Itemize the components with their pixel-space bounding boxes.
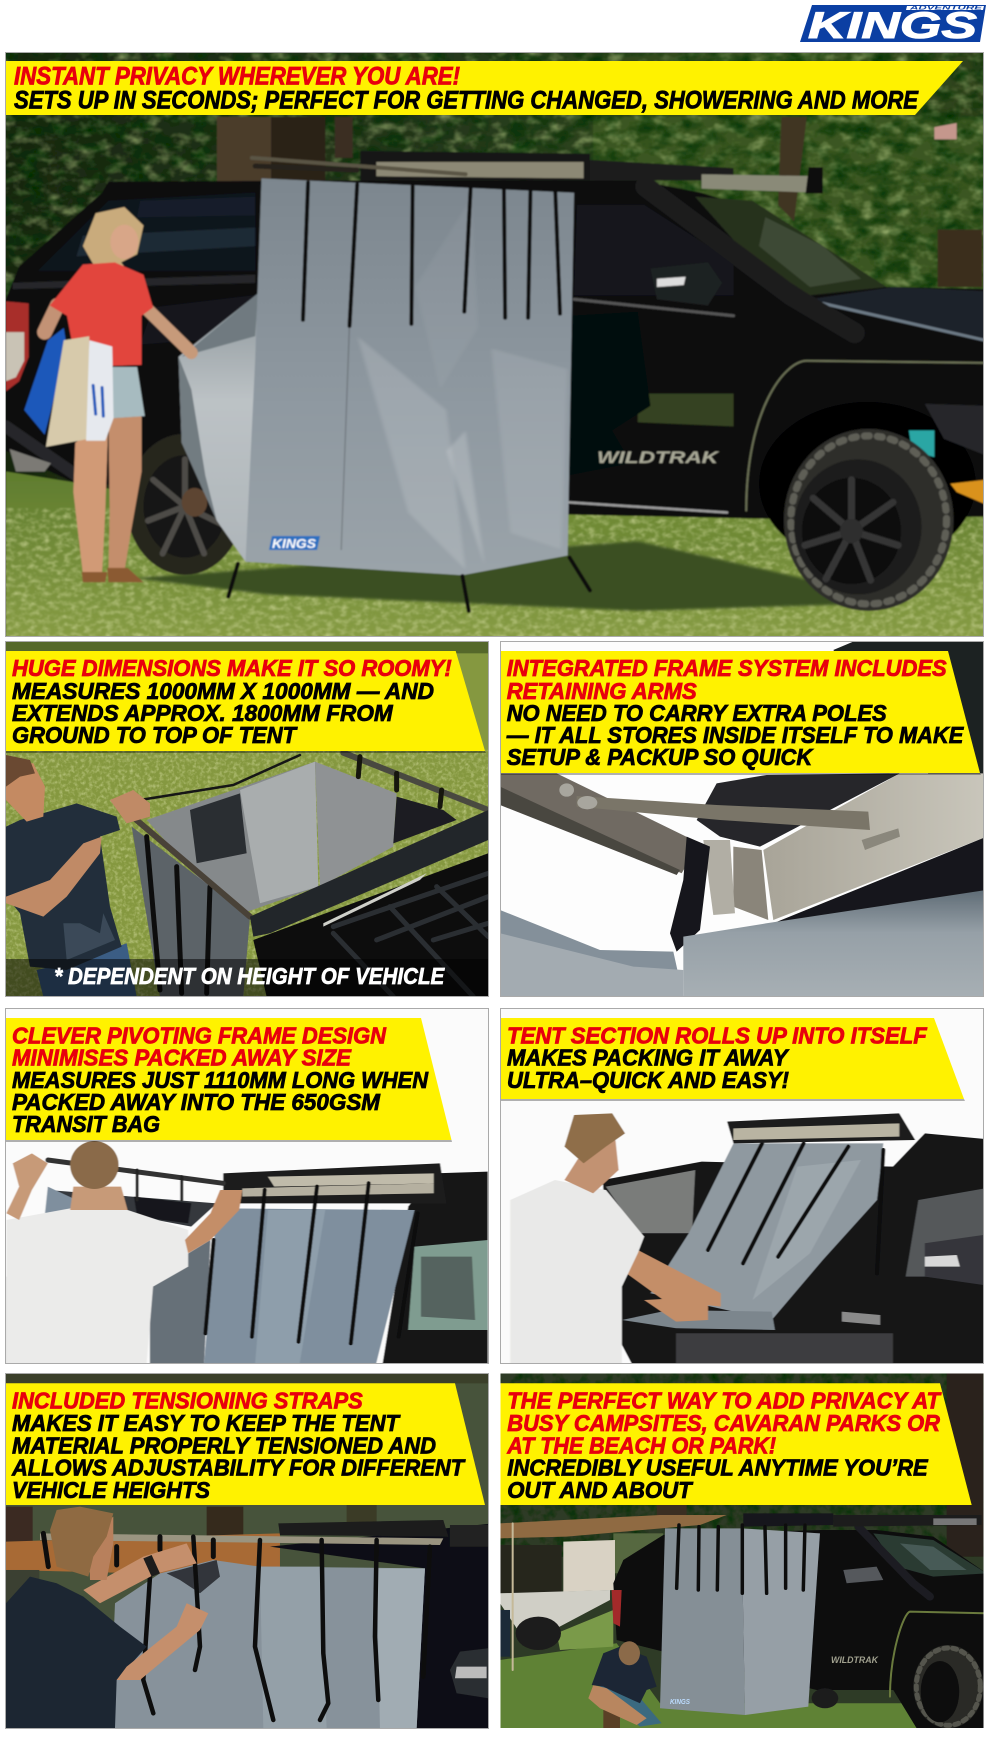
- banner: straps text: INCLUDED TENSIONING STRAPS: [12, 1387, 363, 1413]
- banner: dimensions text: EXTENDS APPROX. 1800MM FROM: [12, 700, 393, 726]
- banner: campsite text: BUSY CAMPSITES, CAVARAN PARKS OR: [507, 1410, 940, 1436]
- photo: man tensioning straps: [0, 1370, 493, 1730]
- banner: pivoting text: [6, 1018, 452, 1142]
- banner: rolls up text: [500, 1018, 965, 1101]
- banner: dimensions text: [6, 651, 486, 753]
- banner: pivoting text: CLEVER PIVOTING FRAME DESIGN: [12, 1022, 387, 1048]
- banner: campsite text: INCREDIBLY USEFUL ANYTIME YOU’RE: [507, 1455, 929, 1481]
- banner: straps text: MAKES IT EASY TO KEEP THE TENT: [12, 1410, 401, 1436]
- banner: campsite text: THE PERFECT WAY TO ADD PRIVACY AT: [507, 1387, 942, 1413]
- banner: frame text: INTEGRATED FRAME SYSTEM INCLUDES: [507, 655, 947, 681]
- logo: Kings Adventure: KINGS: [808, 5, 977, 46]
- photo: man with open tent on roof rack: [0, 640, 493, 1000]
- panel: hero photo with banner: [0, 49, 1000, 644]
- banner: frame text: NO NEED TO CARRY EXTRA POLES: [507, 700, 887, 726]
- banner: frame text: — IT ALL STORES INSIDE ITSELF TO MAKE: [506, 722, 965, 748]
- banner: hero headline: [6, 61, 963, 115]
- logo: Kings Adventure: ADVENTURE: [908, 6, 984, 12]
- door badge: Wildtrak: WILDTRAK: [597, 448, 720, 467]
- banner: campsite text: OUT AND ABOUT: [507, 1477, 693, 1503]
- banner: pivoting text: TRANSIT BAG: [12, 1111, 160, 1137]
- photo: man rolling tent against ute: [510, 1113, 983, 1363]
- banner: campsite text: [500, 1383, 972, 1505]
- door badge: Wildtrak small: WILDTRAK: [831, 1655, 879, 1665]
- tent label: KINGS small: KINGS: [670, 1699, 690, 1706]
- banner: rolls up text: ULTRA–QUICK AND EASY!: [507, 1067, 789, 1093]
- banner: straps text: [6, 1383, 485, 1505]
- hero heading: INSTANT PRIVACY WHEREVER YOU ARE!: [14, 63, 460, 90]
- banner: dimensions text: GROUND TO TOP OF TENT: [12, 722, 298, 748]
- banner: campsite text: AT THE BEACH OR PARK!: [506, 1432, 776, 1458]
- banner: rolls up text: TENT SECTION ROLLS UP INTO ITSELF: [507, 1022, 927, 1048]
- panel: tent rolls up: [497, 1000, 995, 1367]
- tent label: KINGS: KINGS: [272, 536, 316, 551]
- photo: retaining arm close-up: [500, 640, 987, 1000]
- banner: pivoting text: MEASURES JUST 1110MM LONG WHEN: [12, 1067, 429, 1093]
- photo: woman beside tent on black ute: [0, 49, 1000, 644]
- photo: tent on ute at campsite: [500, 1370, 987, 1730]
- photo: man in white shirt at tent: [6, 1141, 488, 1363]
- banner: rolls up text: MAKES PACKING IT AWAY: [507, 1045, 790, 1071]
- banner: pivoting text: MINIMISES PACKED AWAY SIZE: [12, 1045, 352, 1071]
- panel: huge dimensions: [0, 640, 493, 1000]
- banner: dimensions text: HUGE DIMENSIONS MAKE IT SO ROOMY!: [12, 655, 452, 681]
- caption strip: [6, 959, 489, 996]
- logo: Kings Adventure: [800, 5, 986, 46]
- panel: pivoting frame: [0, 1000, 497, 1367]
- caption strip: * DEPENDENT ON HEIGHT OF VEHICLE: [54, 963, 445, 989]
- panel: privacy at campsites: [500, 1370, 987, 1730]
- banner: pivoting text: PACKED AWAY INTO THE 650GSM: [12, 1089, 380, 1115]
- banner: straps text: MATERIAL PROPERLY TENSIONED AND: [12, 1432, 436, 1458]
- panel: integrated frame system: [500, 640, 987, 1000]
- banner: straps text: ALLOWS ADJUSTABILITY FOR DIFFERENT: [11, 1455, 466, 1481]
- panel: tensioning straps: [0, 1370, 493, 1730]
- banner: straps text: VEHICLE HEIGHTS: [12, 1477, 210, 1503]
- banner: frame text: RETAINING ARMS: [507, 678, 697, 704]
- banner: frame text: SETUP & PACKUP SO QUICK: [507, 744, 814, 770]
- hero subheading: SETS UP IN SECONDS; PERFECT FOR GETTING CHANGED, SHOWERING AND MORE: [14, 87, 919, 114]
- banner: frame text: [500, 651, 981, 775]
- banner: dimensions text: MEASURES 1000MM X 1000MM — AND: [12, 678, 434, 704]
